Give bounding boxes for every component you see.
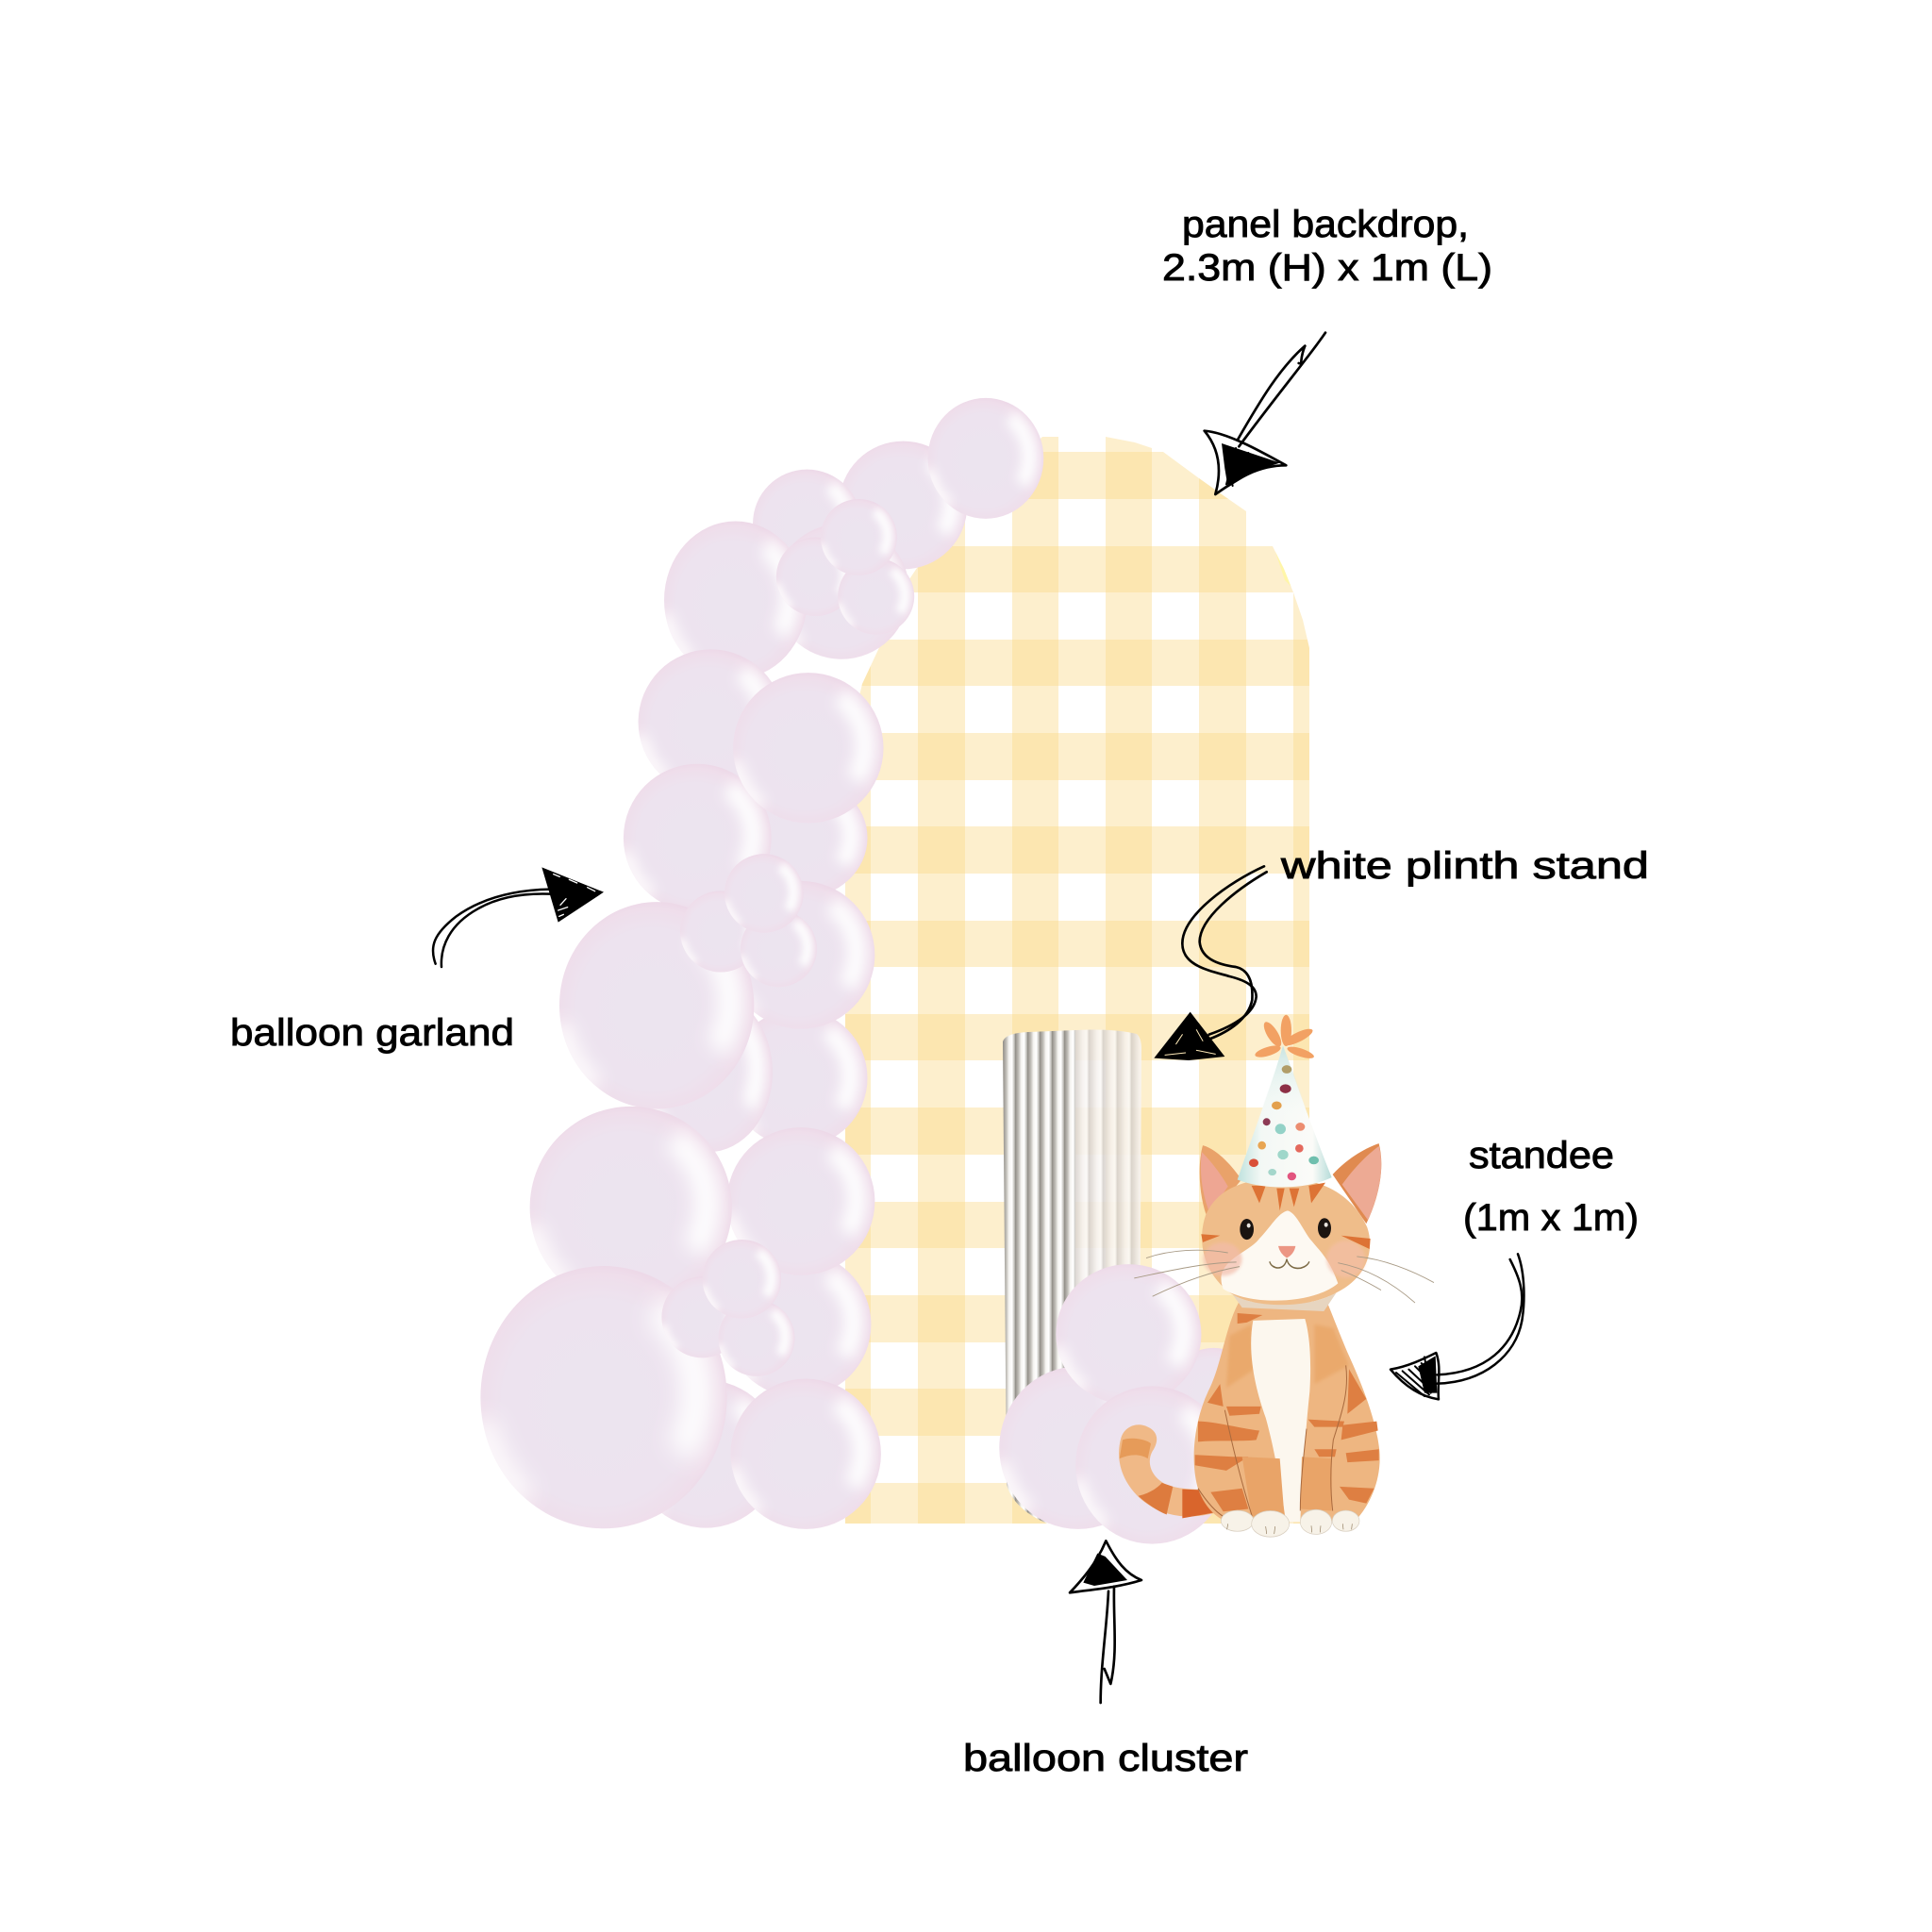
party hat (1238, 1015, 1332, 1188)
label: balloon cluster: balloon cluster (963, 1738, 1248, 1779)
white plinth stand (1003, 1030, 1141, 1524)
cat head (1201, 1178, 1371, 1311)
label: standee: (1m x 1m) (1463, 1197, 1639, 1239)
standee: party cat (1119, 1015, 1434, 1537)
label: panel backdrop: panel backdrop, (1182, 204, 1469, 245)
arrow: balloon cluster (1070, 1541, 1141, 1703)
label: standee: standee (1469, 1135, 1614, 1176)
arrow: panel backdrop (1205, 333, 1325, 494)
label: standee (1463, 1135, 1639, 1239)
cat ears (1200, 1143, 1381, 1224)
balloon garland (480, 398, 1043, 1529)
balloon cluster (999, 1264, 1258, 1544)
label: white plinth stand: white plinth stand (1280, 845, 1649, 887)
cat tail (1119, 1424, 1220, 1518)
cat paws (1221, 1509, 1359, 1537)
cat whiskers (1134, 1250, 1434, 1303)
arrow: balloon garland (433, 867, 604, 967)
cat body (1194, 1302, 1380, 1523)
panel backdrop: yellow gingham arch (845, 437, 1309, 1524)
label: balloon garland: balloon garland (230, 1012, 514, 1054)
infographic canvas (232, 209, 1647, 1772)
arrow: white plinth stand (1154, 866, 1267, 1060)
arrow: standee (1391, 1254, 1524, 1399)
label: panel backdrop (1162, 204, 1492, 289)
label: panel backdrop: 2.3m (H) x 1m (L) (1162, 247, 1492, 289)
